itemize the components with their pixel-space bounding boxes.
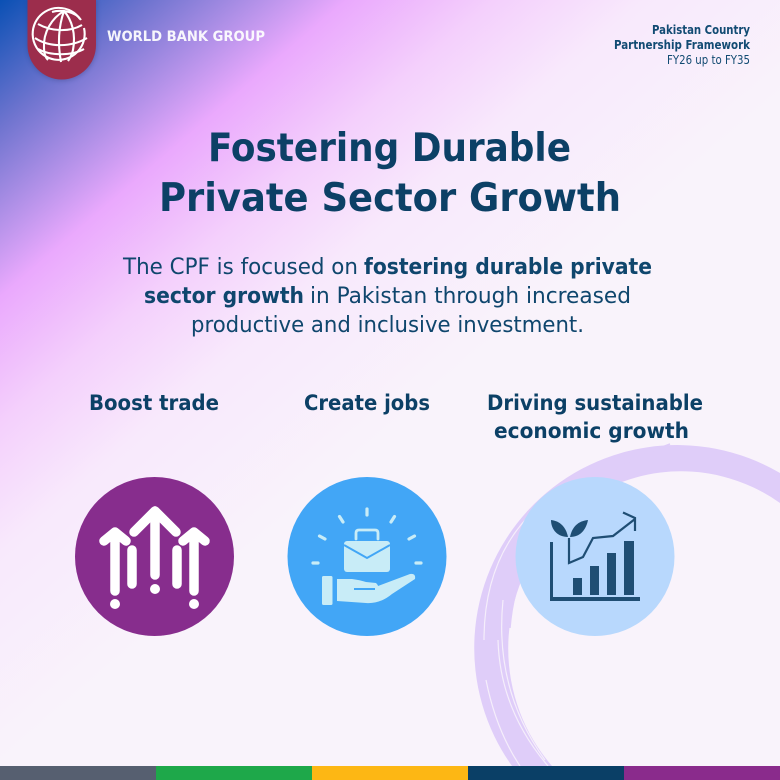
intro paragraph — [122, 254, 652, 338]
icon: plant and growth chart — [516, 477, 674, 636]
icon: globe — [33, 8, 87, 62]
logo: World Bank shield — [27, 0, 97, 81]
intro paragraph: in Pakistan through increased — [310, 283, 631, 309]
intro paragraph: productive and inclusive investment. — [191, 312, 584, 338]
title — [159, 126, 621, 221]
intro paragraph: The CPF is focused on — [122, 254, 358, 280]
icon: rising arrows — [75, 477, 234, 636]
title: Private Sector Growth — [159, 176, 621, 221]
icon: hand holding briefcase — [288, 477, 446, 636]
header: framework title — [614, 23, 751, 67]
intro paragraph: fostering durable private — [364, 254, 652, 280]
decorative brush ring — [474, 444, 780, 766]
header: framework title: Pakistan Country — [652, 23, 750, 37]
column heading: boost trade: Boost trade — [89, 391, 219, 416]
logo wordmark: WORLD BANK GROUP — [107, 29, 265, 45]
footer colour bar — [0, 766, 780, 780]
header: framework title: FY26 up to FY35 — [667, 53, 750, 67]
column heading: create jobs: Create jobs — [304, 391, 430, 416]
intro paragraph: sector growth — [144, 283, 304, 309]
column heading: driving sustainable economic growth: economic growth — [494, 419, 689, 444]
title: Fostering Durable — [208, 126, 571, 171]
column heading: driving sustainable economic growth — [487, 391, 703, 444]
column heading: driving sustainable economic growth: Driving sustainable — [487, 391, 703, 416]
header: framework title: Partnership Framework — [614, 38, 751, 52]
